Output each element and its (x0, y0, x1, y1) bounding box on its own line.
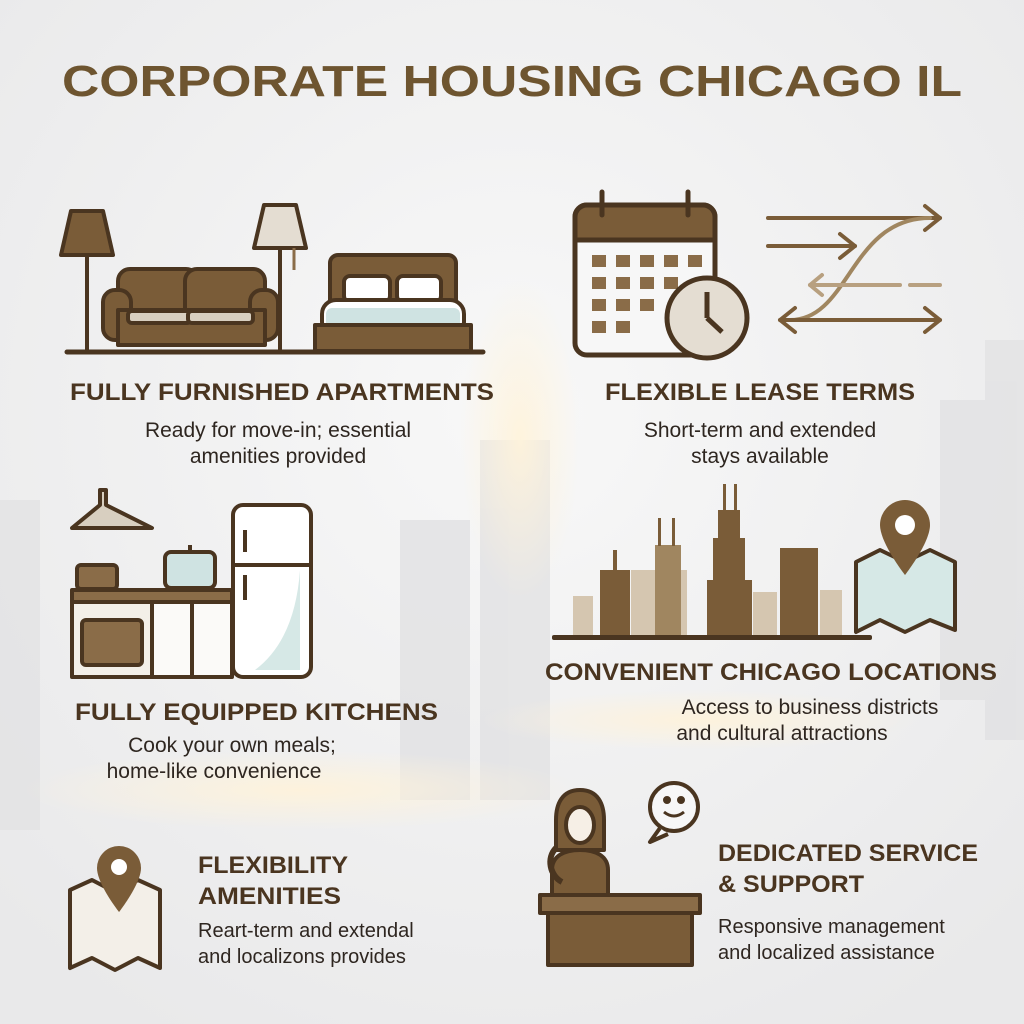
text: service desc: Responsive management (718, 916, 945, 938)
heading: service: DEDICATED SERVICE (718, 840, 978, 867)
heading: flexibility amenities: FLEXIBILITY (198, 852, 348, 879)
faint background buildings (0, 340, 1024, 830)
icon: arrows (768, 206, 940, 332)
text: locations desc: and cultural attractions (676, 722, 888, 745)
heading: kitchens: FULLY EQUIPPED KITCHENS (75, 699, 438, 726)
text: furnished desc: Ready for move-in; essential (145, 419, 411, 442)
icon: skyline and map (552, 484, 955, 640)
text: lease desc: stays available (691, 445, 829, 468)
text: service desc: and localized assistance (718, 942, 935, 964)
icon: furniture (61, 205, 483, 352)
text: lease desc: Short-term and extended (644, 419, 876, 442)
icon: receptionist (540, 783, 700, 965)
text: flexibility desc: and localizons provides (198, 946, 406, 968)
text: flexibility desc: Reart-term and extendal (198, 920, 414, 942)
heading: locations: CONVENIENT CHICAGO LOCATIONS (545, 659, 997, 686)
icon: kitchen (72, 490, 311, 677)
heading: service: & SUPPORT (718, 871, 864, 898)
text: kitchens desc: Cook your own meals; (128, 734, 336, 757)
heading: flexible lease: FLEXIBLE LEASE TERMS (605, 379, 915, 406)
text: kitchens desc: home-like convenience (107, 760, 321, 783)
icon: map pin (70, 846, 160, 970)
title: CORPORATE HOUSING CHICAGO IL (62, 57, 962, 106)
heading: fully furnished: FULLY FURNISHED APARTMENTS (70, 379, 494, 406)
heading: flexibility amenities: AMENITIES (198, 883, 341, 910)
text: locations desc: Access to business districts (682, 696, 938, 719)
text: furnished desc: amenities provided (190, 445, 366, 468)
icon: calendar with clock (575, 192, 747, 358)
